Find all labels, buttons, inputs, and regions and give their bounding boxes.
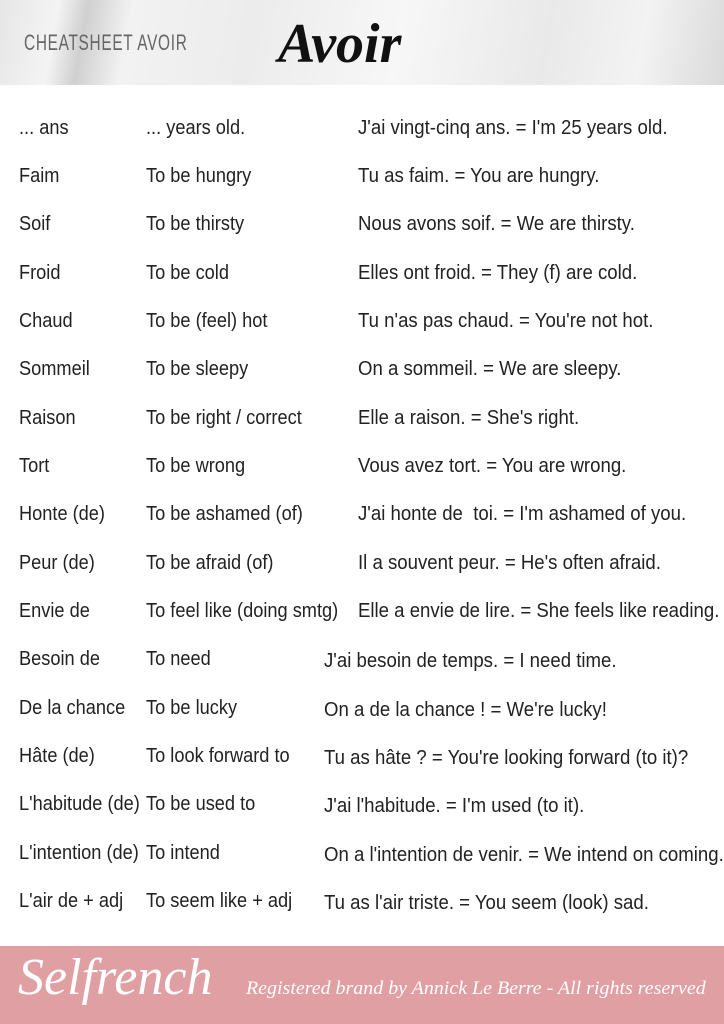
vocabulary table: Elle a raison. = She's right.	[358, 407, 579, 429]
brand logo: Selfrench	[18, 949, 212, 1006]
vocabulary table: J'ai vingt-cinq ans. = I'm 25 years old.	[358, 117, 668, 139]
vocabulary table: Sommeil	[19, 358, 90, 380]
vocabulary table: Soif	[19, 213, 50, 235]
vocabulary table: Tu as faim. = You are hungry.	[358, 165, 599, 187]
vocabulary table: Envie de	[19, 600, 90, 622]
vocabulary table: Nous avons soif. = We are thirsty.	[358, 213, 635, 235]
vocabulary table: To intend	[146, 842, 220, 864]
vocabulary table: Chaud	[19, 310, 73, 332]
vocabulary table: To be hungry	[146, 165, 251, 187]
vocabulary table: On a sommeil. = We are sleepy.	[358, 358, 621, 380]
vocabulary table	[19, 117, 724, 914]
vocabulary table: Tort	[19, 455, 49, 477]
vocabulary table: Froid	[19, 262, 60, 284]
header banner	[0, 0, 724, 85]
vocabulary table: ... years old.	[146, 117, 245, 139]
vocabulary table: J'ai besoin de temps. = I need time.	[324, 650, 617, 672]
vocabulary table: To seem like + adj	[146, 890, 292, 912]
vocabulary table: Faim	[19, 165, 59, 187]
vocabulary table: On a de la chance ! = We're lucky!	[324, 699, 607, 721]
vocabulary table: To be used to	[146, 793, 255, 815]
vocabulary table: De la chance	[19, 697, 125, 719]
vocabulary table: L'habitude (de)	[19, 793, 140, 815]
vocabulary table: Besoin de	[19, 648, 100, 670]
vocabulary table: To be wrong	[146, 455, 245, 477]
vocabulary table: L'intention (de)	[19, 842, 139, 864]
vocabulary table: Peur (de)	[19, 552, 95, 574]
vocabulary table: Tu n'as pas chaud. = You're not hot.	[358, 310, 653, 332]
vocabulary table: Hâte (de)	[19, 745, 95, 767]
vocabulary table: Il a souvent peur. = He's often afraid.	[358, 552, 661, 574]
vocabulary table: To be thirsty	[146, 213, 244, 235]
vocabulary table: To be right / correct	[146, 407, 302, 429]
vocabulary table: Tu as l'air triste. = You seem (look) sad.	[324, 892, 649, 914]
vocabulary table: Elles ont froid. = They (f) are cold.	[358, 262, 637, 284]
vocabulary table: On a l'intention de venir. = We intend on coming.	[324, 844, 724, 866]
vocabulary table: To be (feel) hot	[146, 310, 267, 332]
vocabulary table: To be ashamed (of)	[146, 503, 303, 525]
vocabulary table: To be lucky	[146, 697, 237, 719]
footer banner	[0, 946, 724, 1024]
vocabulary table: Elle a envie de lire. = She feels like reading.	[358, 600, 719, 622]
vocabulary table: To look forward to	[146, 745, 290, 767]
vocabulary table: Raison	[19, 407, 76, 429]
vocabulary table: ... ans	[19, 117, 69, 139]
vocabulary table: Tu as hâte ? = You're looking forward (to it)?	[324, 747, 688, 769]
vocabulary table: J'ai l'habitude. = I'm used (to it).	[324, 795, 584, 817]
vocabulary table: To be afraid (of)	[146, 552, 273, 574]
copyright text: Registered brand by Annick Le Berre - All rights reserved	[246, 978, 706, 999]
title: Avoir	[278, 13, 401, 75]
vocabulary table: To need	[146, 648, 211, 670]
vocabulary table: Vous avez tort. = You are wrong.	[358, 455, 626, 477]
vocabulary table: J'ai honte de toi. = I'm ashamed of you.	[358, 503, 686, 525]
vocabulary table: To be sleepy	[146, 358, 248, 380]
vocabulary table: Honte (de)	[19, 503, 105, 525]
vocabulary table: L'air de + adj	[19, 890, 123, 912]
subtitle: CHEATSHEET AVOIR	[24, 30, 188, 55]
vocabulary table: To be cold	[146, 262, 229, 284]
vocabulary table: To feel like (doing smtg)	[146, 600, 338, 622]
